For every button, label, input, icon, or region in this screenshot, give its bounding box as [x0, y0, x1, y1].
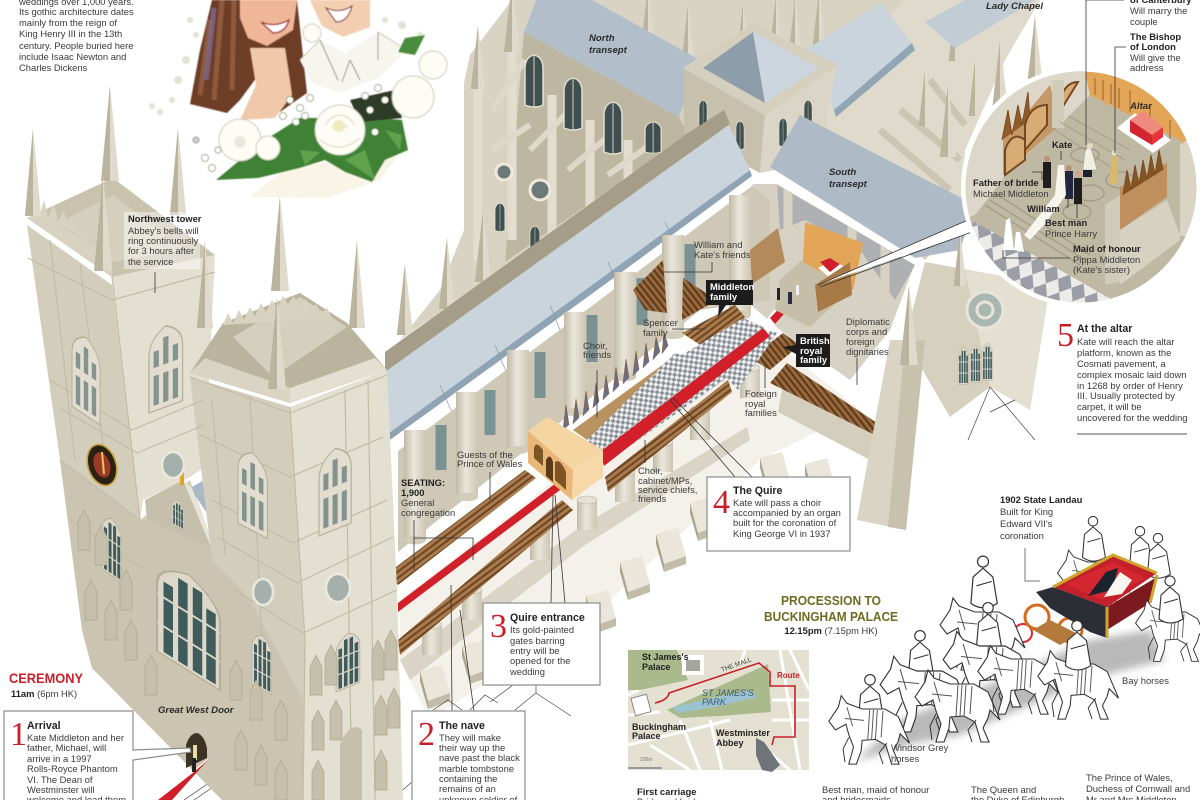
heading: Ceremony: [9, 670, 84, 699]
nave roof sliver behind gable: [190, 478, 213, 522]
callout 4: The Quire: built for the coronation of: [733, 517, 837, 528]
callout: Northwest tower: the service: [128, 256, 173, 267]
organ pipes: [563, 332, 668, 430]
label: William and Kate's friends: Kate's friends: [694, 249, 751, 260]
callout 1: Arrival: 1: [10, 716, 27, 753]
callout 5: At the altar: Cosmati pavement, a: [1077, 358, 1166, 369]
label: North transept: transept: [589, 45, 628, 56]
north and east building mass: [397, 0, 1042, 340]
callout 5: At the altar: Kate will reach the altar: [1077, 336, 1174, 347]
nave north wall with columns: [398, 186, 770, 552]
label: Choir, cabinet/MPs: service chiefs,: [638, 484, 697, 495]
top-left intro text: mainly from the reign of: [19, 17, 117, 28]
label: South transept: South: [829, 167, 856, 178]
transept piers and flying buttresses: [478, 30, 965, 262]
callout 2: The nave: [412, 585, 525, 800]
heading: Procession to Buckingham Palace: PROCESSION TO: [781, 593, 881, 608]
rose windows: [162, 452, 350, 605]
callout 1: Arrival: Rolls-Royce Phantom: [27, 763, 118, 774]
Windsor Grey horses near row: [829, 576, 1200, 764]
circle labels: Kate: [1052, 139, 1072, 150]
label: Windsor Grey horses: horses: [891, 753, 919, 764]
label: Choir, cabinet/MPs: friends: [638, 493, 666, 504]
label: Diplomatic corps and foreign dignitaries: Diplomatic: [846, 316, 890, 327]
north transept roof: [524, 0, 700, 117]
callout 2: The nave: marble tombstone: [439, 763, 514, 774]
crossing lantern tower: [683, 23, 838, 173]
callout 5: At the altar: carpet, it will be: [1077, 401, 1142, 412]
circle labels: Father of bride: [973, 177, 1039, 188]
label: 1902 State Landau: Built for King: [1000, 506, 1053, 517]
route map: Westminster: [716, 728, 770, 738]
clock: [82, 441, 122, 489]
label: Foreign royal families: [745, 362, 777, 418]
circle labels: Pippa Middleton: [1073, 254, 1140, 265]
callout 3: Quire entrance: entry will be: [510, 645, 560, 656]
heading: Procession to Buckingham Palace: [764, 593, 898, 636]
callout 1: Arrival: Westminster will: [27, 784, 95, 795]
callout 4: The Quire: King George VI in 1937: [733, 528, 830, 539]
label: Spencer family: Spencer: [643, 317, 678, 328]
label: Choir, cabinet/MPs: cabinet/MPs,: [638, 475, 692, 486]
tag: British royal family: family: [800, 354, 828, 365]
right tower faces: [190, 377, 305, 700]
figures at the altar: [1003, 143, 1118, 252]
label: Foreign royal families: families: [745, 407, 777, 418]
callout 2: The nave: containing the: [439, 773, 497, 784]
magnified altar circle: [960, 67, 1200, 310]
callout: Northwest tower: [124, 212, 202, 293]
label: Spencer family: [643, 317, 705, 338]
state landau coach: [1014, 555, 1157, 645]
callout 5: At the altar: in 1268 by order of Henry: [1077, 380, 1183, 391]
callout 5: At the altar: III. Usually protected by: [1077, 390, 1175, 401]
tag: Middleton family: Middleton: [710, 281, 755, 292]
callout 2: The nave: The nave: [439, 720, 485, 732]
callout: officiants: of London: [1130, 41, 1176, 52]
west front of abbey: [25, 85, 403, 800]
heading: Procession to Buckingham Palace: BUCKINGHAM PALACE: [764, 609, 898, 624]
label: Diplomatic corps and foreign dignitaries: [846, 316, 890, 385]
callout 5: At the altar: platform, known as the: [1077, 347, 1171, 358]
label: Choir, friends: friends: [583, 349, 611, 360]
label: Great West Door: Great West Door: [158, 705, 235, 716]
callout 3: Quire entrance: [483, 495, 600, 685]
callout 3: Quire entrance: Quire entrance: [510, 612, 585, 624]
callout: Northwest tower: for 3 hours after: [128, 245, 194, 256]
label: 1902 State Landau: 1902 State Landau: [1000, 494, 1083, 505]
heading: Procession to Buckingham Palace: 12.15pm (7.15pm HK): [784, 625, 878, 636]
label: Choir, cabinet/MPs: [638, 440, 697, 504]
callout 1: Arrival: father, Michael, will: [27, 742, 106, 753]
callout 2: The nave: their way up the: [439, 742, 505, 753]
route map: Palace: [642, 662, 671, 672]
callout 5: At the altar: 5: [1057, 317, 1074, 354]
callout 4: The Quire: Kate will pass a choir: [733, 497, 821, 508]
right tower top: [190, 293, 387, 403]
left tower top: [27, 178, 215, 277]
back horses by coach: [1058, 516, 1170, 611]
label: Diplomatic corps and foreign dignitaries: foreign: [846, 336, 875, 347]
Great West Door and entry carpet: [148, 733, 210, 800]
circle labels: Prince Harry: [1045, 228, 1097, 239]
callout: officiants: address: [1130, 62, 1164, 73]
south arcade stubs: [400, 364, 880, 680]
tag: Middleton family: [706, 280, 755, 317]
route map: [628, 650, 809, 772]
caption: Prince of Wales: Duchess of Cornwall and: [1086, 783, 1190, 794]
carriage procession: [829, 516, 1200, 764]
callout 1: Arrival: VI. The Dean of: [27, 774, 93, 785]
label: Diplomatic corps and foreign dignitaries: corps and: [846, 326, 887, 337]
tag: British royal family: [783, 334, 830, 367]
callout: officiants: couple: [1130, 16, 1158, 27]
route map: PARK: [702, 697, 727, 707]
label: Lady Chapel: Lady Chapel: [986, 1, 1043, 12]
callout: Northwest tower: ring continuously: [128, 235, 199, 246]
south transept facade and buttress: [857, 230, 1050, 530]
tag: Middleton family: family: [710, 291, 738, 302]
circle labels: Michael Middleton: [973, 188, 1049, 199]
callout 1: Arrival: [4, 711, 191, 800]
callout 5: At the altar: uncovered for the wedding: [1077, 412, 1188, 423]
label: William and Kate's friends: [660, 239, 751, 272]
callout 5: At the altar: [1057, 317, 1188, 434]
route line: [655, 663, 795, 745]
callout 2: The nave: 2: [418, 716, 435, 753]
caption: First carriage: First carriage: [637, 786, 696, 797]
chequered quire floor: [587, 318, 777, 462]
label: Foreign royal families: Foreign: [745, 388, 777, 399]
label: 1902 State Landau: Edward VII's: [1000, 518, 1053, 529]
label: Guests of the Prince of Wales: [457, 449, 523, 500]
callout 3: Quire entrance: opened for the: [510, 655, 570, 666]
callout 1: Arrival: Arrival: [27, 720, 61, 732]
callout 1: Arrival: Kate Middleton and her: [27, 732, 124, 743]
circle labels: William: [1027, 203, 1060, 214]
circle labels: [973, 101, 1153, 275]
callout 2: The nave: remains of an: [439, 783, 496, 794]
tower windows: [72, 320, 360, 694]
label: South transept: transept: [829, 179, 868, 190]
east roofs: [805, 0, 1035, 117]
route map: Buckingham: [632, 722, 686, 732]
top-left intro text: Its gothic architecture dates: [19, 6, 134, 17]
callout: officiants: Will give the: [1130, 52, 1181, 63]
callout 1: Arrival: arrive in a 1997: [27, 753, 92, 764]
heading: Ceremony: 11am (6pm HK): [11, 688, 77, 699]
west pews and north quire pews: [388, 260, 880, 655]
label: 1902 State Landau: coronation: [1000, 530, 1044, 541]
route map: Route: [777, 671, 800, 680]
seating label: SEATING:: [401, 477, 445, 488]
top-left intro text: King Henry III in the 13th: [19, 28, 122, 39]
callout 4: The Quire: The Quire: [733, 485, 783, 497]
seating label: congregation: [401, 507, 455, 518]
circle labels: Maid of honour: [1073, 243, 1141, 254]
circle labels: (Kate's sister): [1073, 264, 1130, 275]
label: Windsor Grey horses: Windsor Grey: [891, 742, 949, 753]
pinnacles: [25, 85, 365, 389]
callout 4: The Quire: [670, 398, 850, 551]
gable between towers: [145, 470, 216, 552]
route map: ST JAMES'S: [702, 688, 754, 698]
seating label: [401, 477, 473, 570]
callout: officiants: The Bishop: [1130, 31, 1181, 42]
callout: officiants: [1086, 0, 1192, 153]
wire outlines of cloister: [184, 387, 1035, 800]
left tower east face: [112, 255, 215, 520]
seating label: General: [401, 497, 434, 508]
route map: 200m: [640, 757, 653, 763]
caption: Prince of Wales: The Prince of Wales,: [1086, 772, 1173, 783]
top-left intro text: century. People buried here: [19, 40, 133, 51]
label: William and Kate's friends: William and: [694, 239, 742, 250]
callout: officiants: Will marry the: [1130, 5, 1187, 16]
callout 4: The Quire: accompanied by an organ: [733, 507, 841, 518]
label: Diplomatic corps and foreign dignitaries: dignitaries: [846, 346, 889, 357]
label: Guests of the Prince of Wales: Prince of Wales: [457, 458, 523, 469]
callout 5: At the altar: At the altar: [1077, 323, 1132, 335]
label: Choir, cabinet/MPs: Choir,: [638, 465, 662, 476]
caption: Best man: Best man, maid of honour: [822, 784, 929, 795]
tag: British royal family: British: [800, 335, 830, 346]
label: Choir, friends: Choir,: [583, 340, 608, 351]
callout: Northwest tower: Abbey's bells will: [128, 225, 199, 236]
portrait: Kate and William with bouquet: [149, 0, 447, 198]
south transept roof: [770, 115, 975, 258]
label: Guests of the Prince of Wales: Guests of the: [457, 449, 513, 460]
label: 1902 State Landau: [1000, 494, 1083, 581]
route map: THE MALL: [720, 656, 753, 674]
callout 2: The nave: They will make: [439, 732, 501, 743]
callout: Northwest tower: Northwest tower: [128, 213, 202, 224]
great west window: [157, 555, 220, 690]
top-left intro text: include Isaac Newton and: [19, 51, 126, 62]
transept windows: [495, 55, 661, 257]
lower niches: [78, 510, 400, 800]
Windsor Grey horses far row: [880, 556, 1032, 732]
route map: St James's: [642, 652, 689, 662]
label: North transept: North: [589, 33, 615, 44]
route map: Abbey: [716, 738, 744, 748]
quire entrance screen: [528, 417, 603, 500]
callout 3: Quire entrance: Its gold-painted: [510, 624, 574, 635]
nave and quire floor: [400, 330, 860, 720]
label: Choir, friends: [583, 340, 611, 418]
spires: [397, 0, 1042, 335]
caption: The Queen: The Queen and: [971, 784, 1036, 795]
callout 5: At the altar: complex mosaic laid down: [1077, 369, 1186, 380]
south buttress blocks: [420, 452, 835, 709]
circle labels: Altar: [1129, 101, 1153, 112]
callout 2: The nave: nave past the black: [439, 752, 520, 763]
pointer from altar to circle: [818, 220, 972, 287]
heading: Ceremony: CEREMONY: [9, 670, 84, 686]
callout 3: Quire entrance: gates barring: [510, 635, 565, 646]
string courses and pilasters: [28, 240, 397, 800]
south transept interior: [745, 183, 915, 380]
label: Bay horses: Bay horses: [1122, 675, 1169, 686]
nave roof: [383, 110, 915, 451]
top-left intro text: Charles Dickens: [19, 62, 88, 73]
callout 4: The Quire: 4: [713, 484, 730, 521]
route map: Palace: [632, 731, 661, 741]
label: Foreign royal families: royal: [745, 398, 765, 409]
circle labels: Best man: [1045, 217, 1087, 228]
red carpet: [398, 292, 800, 612]
callout 3: Quire entrance: wedding: [509, 666, 545, 677]
label: Spencer family: family: [643, 327, 668, 338]
tag: British royal family: royal: [800, 345, 822, 356]
altar zone in model: [750, 222, 863, 327]
seating label: 1,900: [401, 487, 424, 498]
callout 3: Quire entrance: 3: [490, 608, 507, 645]
